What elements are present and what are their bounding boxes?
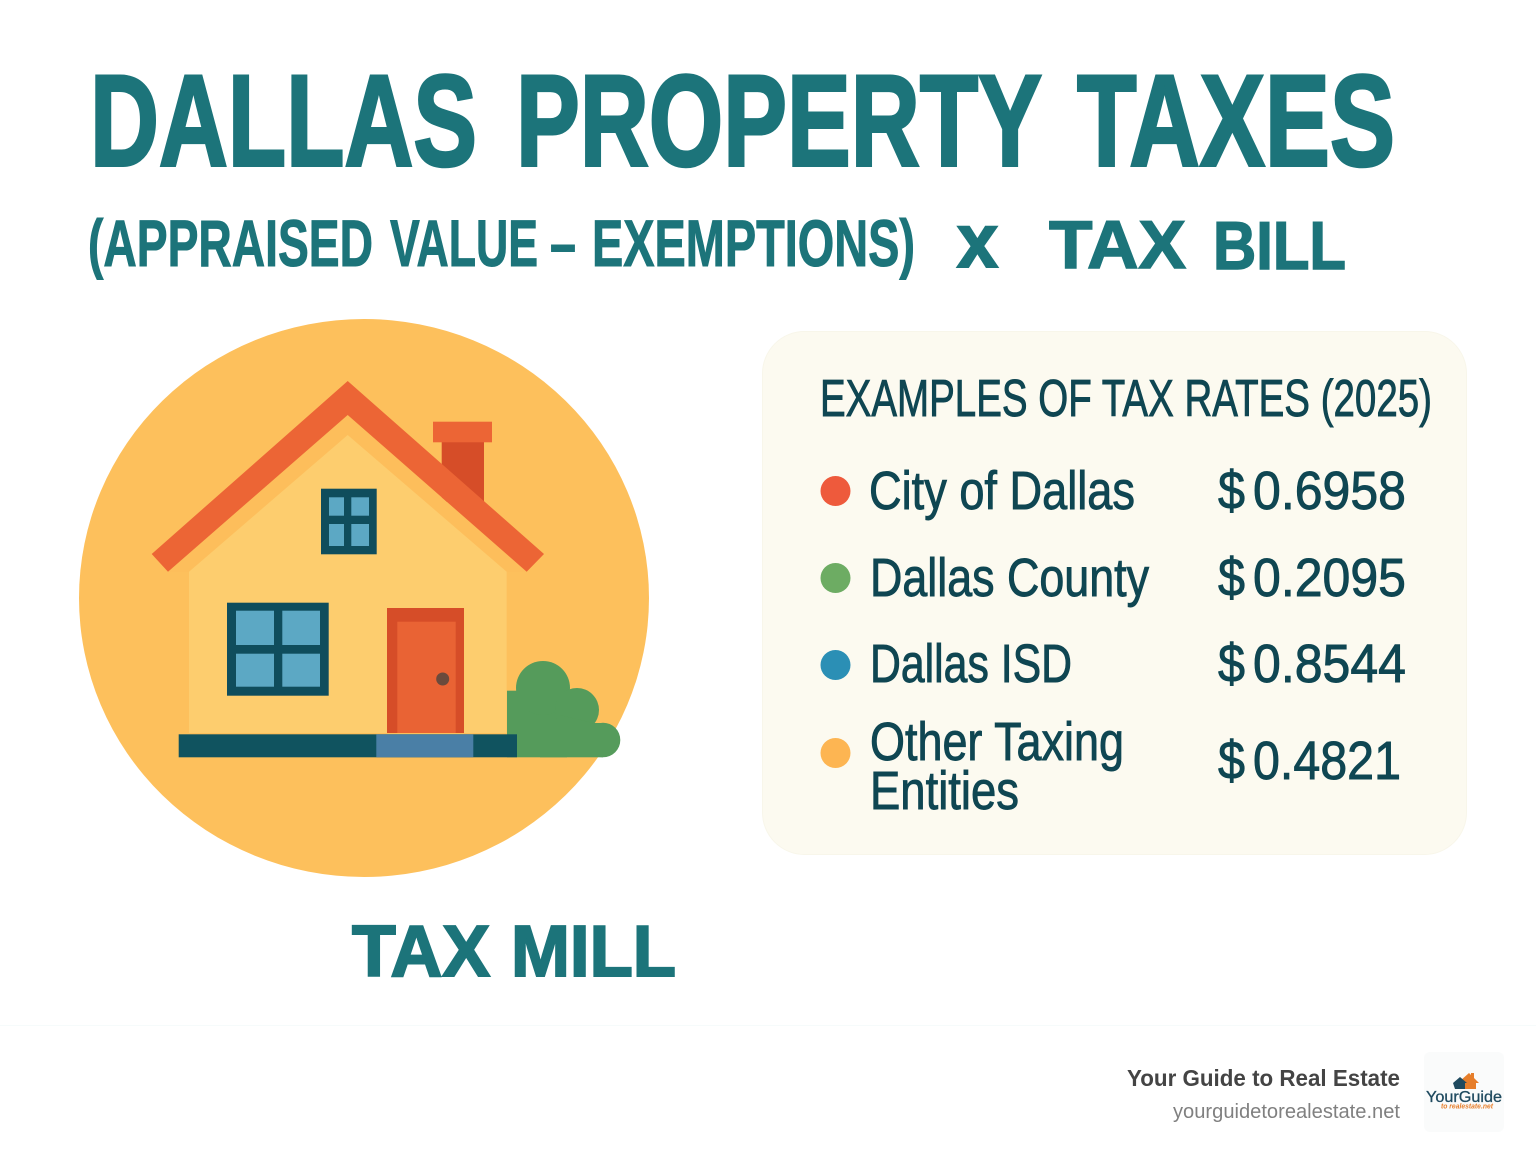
icon: roof (152, 381, 544, 572)
row: dallas county: Dallas County (870, 548, 1149, 608)
row: city of dallas: $ (1218, 461, 1245, 521)
icon: door (387, 608, 464, 733)
icon: foundation (179, 734, 517, 757)
row: city of dallas: 0.6958 (1253, 461, 1406, 521)
row: dallas county: $ (1218, 548, 1245, 608)
formula: appraised value minus exemptions: (APPRAISED (88, 206, 373, 280)
row: dallas isd (820, 634, 1406, 694)
panel: tax rate examples (762, 332, 1466, 854)
logo wordmark: YourGuide (1426, 1089, 1502, 1106)
icon: large window (227, 603, 329, 696)
icon: sun circle (79, 319, 649, 877)
row: other taxing entities (820, 712, 1401, 821)
row: dallas isd: 0.8544 (1253, 634, 1406, 694)
footer website: yourguidetorealestate.net (1173, 1101, 1400, 1123)
logo tagline: to realestate.net (1441, 1102, 1493, 1110)
row: other taxing entities: Other Taxing (870, 712, 1124, 772)
icon: logo house (1453, 1073, 1479, 1089)
row: dallas isd: Dallas ISD (870, 634, 1072, 694)
row: other taxing entities: 0.4821 (1253, 731, 1401, 791)
title: TAXES (1077, 48, 1395, 194)
icon: bush (507, 661, 620, 757)
row: dallas county (820, 548, 1406, 608)
icon: chimney (433, 422, 492, 502)
label: tax mill (352, 912, 676, 992)
row: city of dallas: City of Dallas (869, 461, 1135, 521)
formula: appraised value minus exemptions: VALUE (390, 206, 538, 280)
label: tax mill: TAX (352, 912, 490, 992)
label: tax mill: MILL (511, 912, 676, 992)
formula: appraised value minus exemptions: EXEMPTIONS) (592, 206, 915, 280)
formula: tax bill (1049, 207, 1346, 284)
title: DALLAS (90, 48, 477, 194)
row: dallas county: 0.2095 (1253, 548, 1406, 608)
row: other taxing entities: $ (1218, 731, 1245, 791)
row: dallas isd: $ (1218, 634, 1245, 694)
row: other taxing entities: Entities (870, 761, 1019, 821)
icon: house wall (168, 415, 527, 733)
formula: tax bill: BILL (1213, 208, 1346, 284)
logo (1424, 1052, 1504, 1132)
panel background (762, 332, 1466, 854)
row: city of dallas (820, 461, 1406, 521)
footer brand name: Your Guide to Real Estate (1127, 1065, 1400, 1091)
title: PROPERTY (516, 48, 1042, 194)
formula: tax bill: TAX (1049, 207, 1186, 283)
illustration: house in circle (79, 319, 649, 877)
icon: attic window (321, 489, 377, 554)
formula: appraised value minus exemptions: – (550, 206, 576, 280)
formula: multiply sign: x (957, 199, 998, 284)
formula: appraised value minus exemptions (88, 206, 915, 280)
title (90, 48, 1395, 194)
